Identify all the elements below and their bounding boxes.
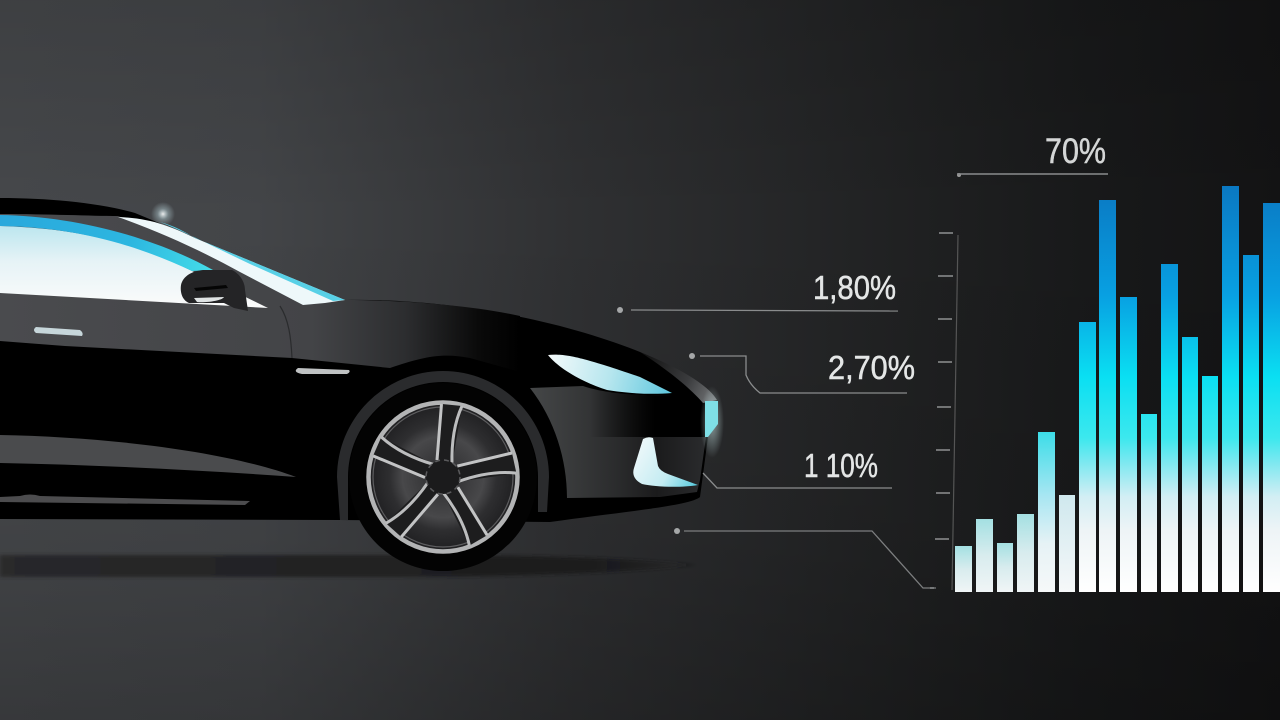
- spoke 1: [437, 404, 462, 465]
- wheel arch: [337, 371, 549, 520]
- lower body crease: [0, 435, 296, 477]
- front black band: [575, 386, 706, 437]
- car silhouette: [0, 198, 712, 522]
- side mirror: [181, 270, 248, 311]
- callout 1.80%: 1,80%: [813, 269, 896, 306]
- callout 2.70%: 2,70%: [828, 349, 915, 386]
- windshield glint: [151, 202, 175, 226]
- chart axis: [930, 233, 958, 590]
- spoke 3: [435, 483, 491, 547]
- callout 1 10%: [703, 447, 892, 488]
- windshield: [118, 217, 345, 305]
- wheel arch ring: [337, 371, 549, 520]
- door seam: [280, 306, 292, 358]
- ground shadow: [0, 555, 697, 577]
- spoke 5: [372, 436, 437, 479]
- hood edge highlight: [640, 352, 717, 403]
- running light glow: [700, 386, 724, 458]
- door and hood panel: [0, 214, 520, 372]
- sill strip: [0, 494, 250, 505]
- alloy wheel: [368, 402, 518, 552]
- door handle: [34, 327, 83, 336]
- tyre: [349, 383, 537, 571]
- front fender panel: [530, 386, 706, 498]
- callout line to chart: [674, 528, 936, 588]
- side window: [0, 226, 268, 308]
- fog light intake: [633, 437, 698, 487]
- side marker: [296, 368, 350, 374]
- headlight: [548, 355, 672, 394]
- window trim band: [0, 215, 213, 271]
- spoke 2: [453, 449, 518, 491]
- callout 1 10%: 1 10%: [804, 447, 878, 484]
- wheel hub: [426, 460, 460, 494]
- spoke 4: [385, 476, 441, 540]
- chart heading 70%: 70%: [1045, 132, 1106, 171]
- callout 2.70%: [689, 349, 915, 393]
- bar chart: [955, 186, 1280, 592]
- chart heading 70%: [957, 132, 1108, 177]
- running light: [705, 401, 718, 437]
- callout 1.80%: [617, 269, 898, 313]
- car: [0, 198, 724, 571]
